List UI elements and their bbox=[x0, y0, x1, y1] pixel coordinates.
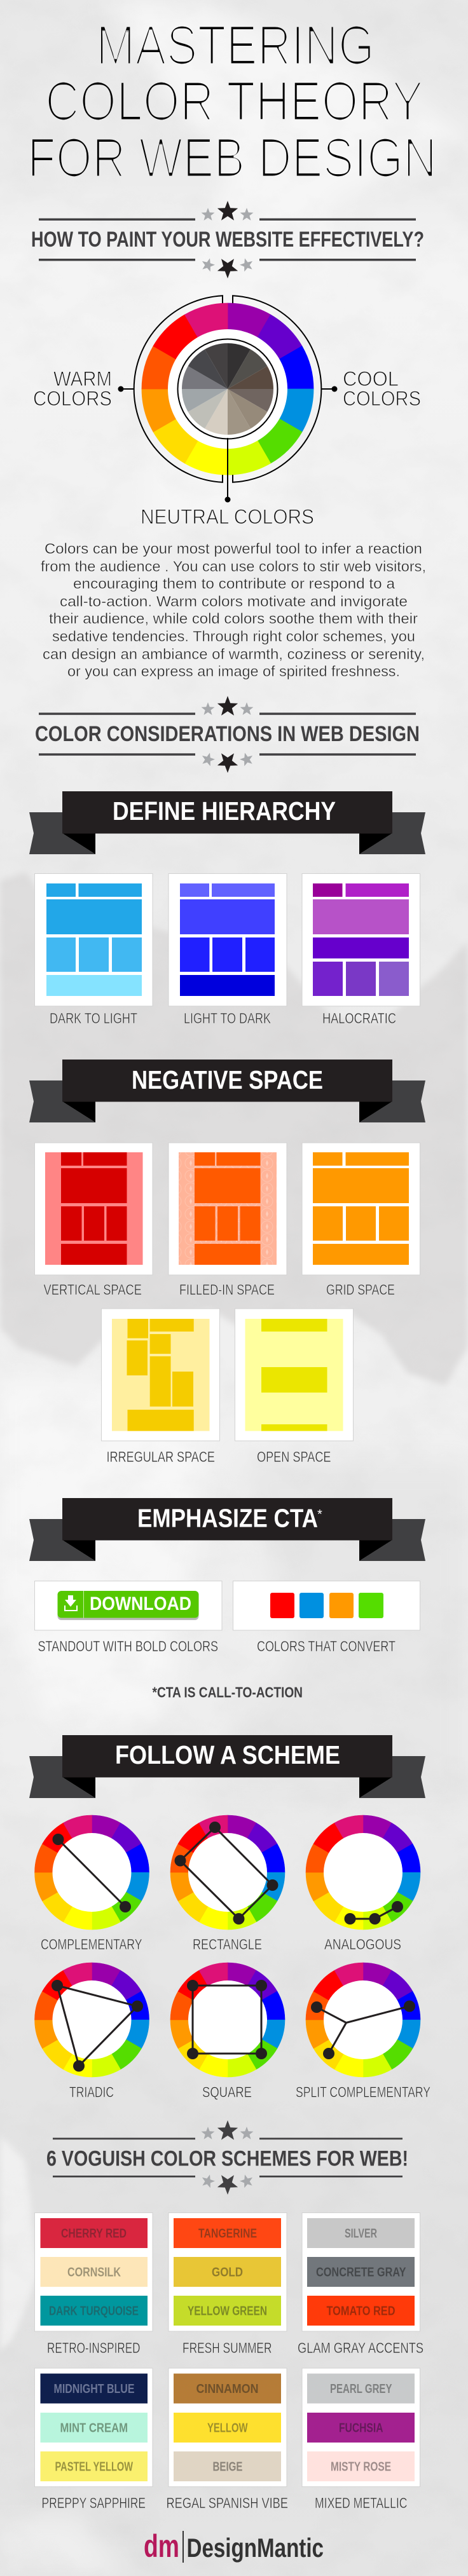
caption: split complementary: SPLIT COMPLEMENTARY bbox=[296, 2083, 430, 2100]
download button bbox=[57, 1591, 198, 1620]
caption: analogous: ANALOGOUS bbox=[324, 1936, 401, 1952]
ribbon: emphasize cta bbox=[29, 1498, 425, 1561]
caption: irregular space: IRREGULAR SPACE bbox=[107, 1448, 215, 1465]
panel: glam gray accents swatches bbox=[302, 2213, 420, 2331]
panel: retro-inspired swatches bbox=[34, 2213, 153, 2331]
panel: irregular space bbox=[102, 1309, 220, 1441]
main color wheel bbox=[118, 296, 337, 502]
ribbon: follow a scheme bbox=[29, 1735, 425, 1798]
ribbon: emphasize cta: * bbox=[317, 1508, 322, 1522]
panel: glam gray accents swatches: SILVER bbox=[345, 2227, 377, 2241]
intro paragraph: can design an ambiance of warmth, coziness or serenity, bbox=[43, 646, 425, 662]
panel: retro-inspired swatches: DARK TURQUOISE bbox=[49, 2305, 139, 2319]
panel: preppy sapphire swatches: MIDNIGHT BLUE bbox=[53, 2382, 135, 2396]
logo: designmantic bbox=[144, 2528, 324, 2564]
logo: designmantic: dm bbox=[144, 2528, 179, 2564]
panel: regal spanish vibe swatches: BEIGE bbox=[212, 2460, 243, 2474]
panel: vertical space bbox=[34, 1143, 153, 1275]
panel: mixed metallic swatches: PEARL GREY bbox=[330, 2382, 392, 2396]
caption: standout with bold colors: STANDOUT WITH BOLD COLORS bbox=[38, 1638, 218, 1654]
panel: filled-in space bbox=[169, 1143, 287, 1275]
caption: regal spanish vibe: REGAL SPANISH VIBE bbox=[167, 2495, 288, 2511]
caption: rectangle: RECTANGLE bbox=[193, 1936, 262, 1952]
panel: halocratic bbox=[302, 873, 420, 1006]
download button: DOWNLOAD bbox=[90, 1593, 191, 1614]
caption: triadic: TRIADIC bbox=[69, 2083, 114, 2100]
ribbon: define hierarchy bbox=[29, 791, 425, 854]
caption: retro-inspired: RETRO-INSPIRED bbox=[47, 2340, 140, 2356]
label: warm colors: WARM bbox=[53, 367, 112, 390]
panel: fresh summer swatches bbox=[169, 2213, 287, 2331]
panel: light to dark bbox=[169, 873, 287, 1006]
intro paragraph: Colors can be your most powerful tool to infer a reaction bbox=[45, 540, 422, 557]
label: warm colors bbox=[33, 367, 112, 410]
caption: dark to light: DARK TO LIGHT bbox=[50, 1010, 137, 1026]
panel: mixed metallic swatches: FUCHSIA bbox=[339, 2422, 383, 2436]
caption: square: SQUARE bbox=[202, 2083, 252, 2100]
wheel: triadic bbox=[34, 1963, 149, 2077]
intro paragraph: sedative tendencies. Through right color schemes, you bbox=[52, 628, 415, 644]
ribbon: negative space: NEGATIVE SPACE bbox=[132, 1065, 323, 1094]
caption: open space: OPEN SPACE bbox=[257, 1448, 331, 1465]
warm and cool bracket arcs bbox=[121, 296, 334, 500]
intro paragraph: call-to-action. Warm colors motivate and invigorate bbox=[60, 593, 408, 610]
logo: designmantic: DesignMantic bbox=[187, 2533, 324, 2563]
panel: glam gray accents swatches: CONCRETE GRAY bbox=[316, 2265, 406, 2279]
caption: complementary: COMPLEMENTARY bbox=[41, 1936, 142, 1952]
intro paragraph: encouraging them to contribute or respond to a bbox=[73, 575, 395, 592]
panel: regal spanish vibe swatches: YELLOW bbox=[207, 2422, 248, 2436]
panel: preppy sapphire swatches: PASTEL YELLOW bbox=[55, 2460, 133, 2474]
ribbon: emphasize cta: EMPHASIZE CTA bbox=[137, 1504, 318, 1533]
caption: mixed metallic: MIXED METALLIC bbox=[315, 2495, 407, 2511]
intro paragraph bbox=[41, 540, 426, 679]
ribbon: define hierarchy: DEFINE HIERARCHY bbox=[113, 796, 336, 826]
caption: light to dark: LIGHT TO DARK bbox=[184, 1010, 272, 1026]
color ring bbox=[142, 303, 313, 475]
panel: grid space bbox=[302, 1143, 420, 1275]
ribbon: negative space bbox=[29, 1060, 425, 1122]
panel: fresh summer swatches: TANGERINE bbox=[198, 2227, 257, 2241]
intro paragraph: their audience, while cold colors soothe them with their bbox=[49, 610, 418, 627]
panel: fresh summer swatches: GOLD bbox=[212, 2265, 243, 2279]
label: neutral colors: NEUTRAL COLORS bbox=[141, 505, 314, 528]
wheel: complementary bbox=[34, 1815, 149, 1930]
ribbon: follow a scheme: FOLLOW A SCHEME bbox=[115, 1740, 340, 1769]
caption: preppy sapphire: PREPPY SAPPHIRE bbox=[42, 2495, 146, 2511]
panel: standout with bold colors bbox=[34, 1581, 222, 1630]
caption: grid space: GRID SPACE bbox=[326, 1281, 395, 1298]
heading: color considerations in web design bbox=[35, 696, 420, 773]
panel: preppy sapphire swatches: MINT CREAM bbox=[60, 2422, 128, 2436]
footnote: *CTA IS CALL-TO-ACTION bbox=[153, 1684, 303, 1701]
caption: halocratic: HALOCRATIC bbox=[322, 1010, 396, 1026]
title: MASTERING bbox=[96, 15, 375, 76]
caption: filled-in space: FILLED-IN SPACE bbox=[179, 1281, 275, 1298]
caption: vertical space: VERTICAL SPACE bbox=[43, 1281, 142, 1298]
panel: retro-inspired swatches: CHERRY RED bbox=[61, 2227, 127, 2241]
intro paragraph: from the audience . You can use colors to stir web visitors, bbox=[41, 558, 426, 575]
label: cool colors: COOL bbox=[343, 367, 399, 390]
wheel: rectangle bbox=[170, 1815, 285, 1930]
intro paragraph: or you can express an image of spirited freshness. bbox=[67, 663, 400, 679]
panel: mixed metallic swatches: MISTY ROSE bbox=[331, 2460, 391, 2474]
panel: fresh summer swatches: YELLOW GREEN bbox=[188, 2305, 267, 2319]
title bbox=[27, 15, 437, 189]
caption: colors that convert: COLORS THAT CONVERT bbox=[257, 1638, 396, 1654]
caption: glam gray accents: GLAM GRAY ACCENTS bbox=[298, 2340, 423, 2356]
caption: fresh summer: FRESH SUMMER bbox=[182, 2340, 272, 2356]
panel: regal spanish vibe swatches: CINNAMON bbox=[196, 2382, 258, 2396]
panel: mixed metallic swatches bbox=[302, 2368, 420, 2486]
neutral color disc bbox=[178, 339, 277, 439]
label: cool colors: COLORS bbox=[343, 387, 421, 410]
wheel: analogous bbox=[306, 1815, 420, 1930]
wheel: square bbox=[170, 1963, 285, 2077]
panel: colors that convert bbox=[233, 1581, 420, 1630]
panel: glam gray accents swatches: TOMATO RED bbox=[327, 2305, 396, 2319]
wheel: split complementary bbox=[306, 1963, 420, 2077]
heading: how to paint your website effectively bbox=[31, 201, 424, 278]
heading: 6 voguish color schemes for web: 6 VOGUISH COLOR SCHEMES FOR WEB! bbox=[46, 2147, 408, 2171]
panel: preppy sapphire swatches bbox=[34, 2368, 153, 2486]
heading: 6 voguish color schemes for web bbox=[46, 2120, 408, 2195]
label: warm colors: COLORS bbox=[33, 387, 112, 410]
panel: retro-inspired swatches: CORNSILK bbox=[67, 2265, 121, 2279]
panel: open space bbox=[235, 1309, 354, 1441]
label: cool colors bbox=[343, 367, 421, 410]
panel: regal spanish vibe swatches bbox=[169, 2368, 287, 2486]
panel: dark to light bbox=[34, 873, 153, 1006]
